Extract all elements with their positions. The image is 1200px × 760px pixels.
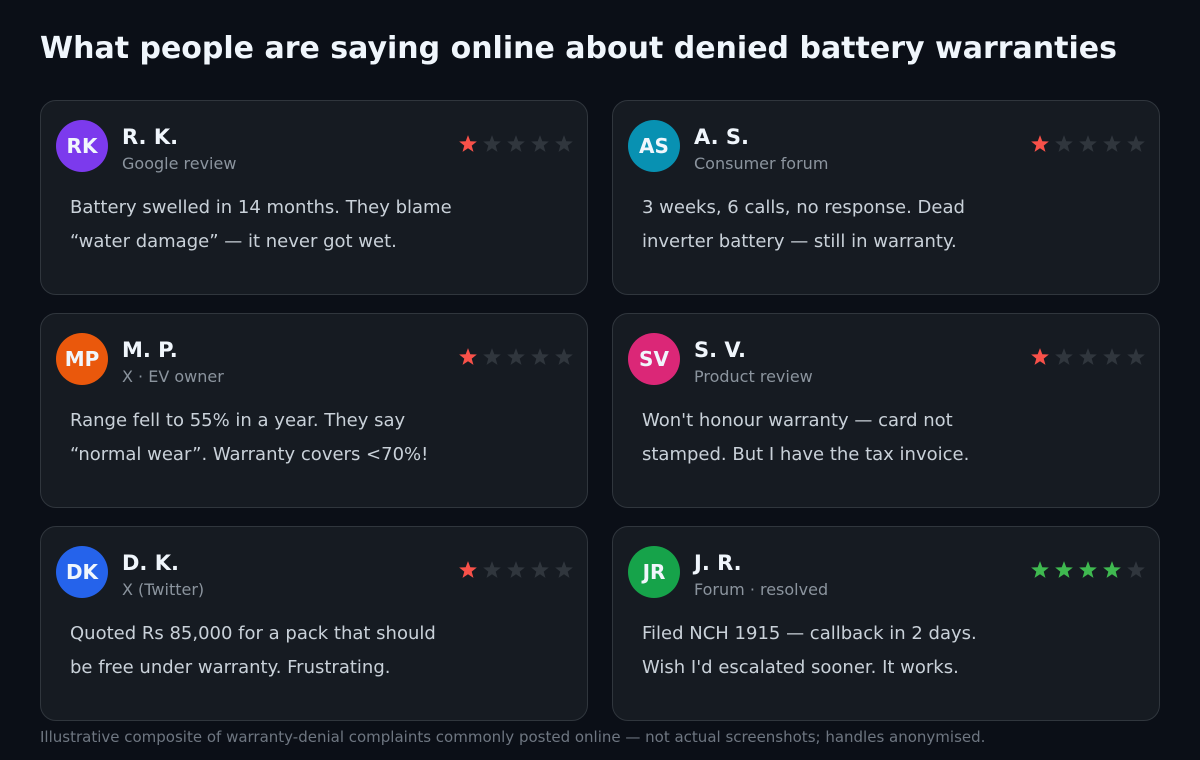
review text: inverter battery — still in warranty. <box>642 231 957 252</box>
review text: Wish I'd escalated sooner. It works. <box>642 657 959 678</box>
rating: 1 of 5 stars <box>459 348 573 365</box>
avatar: AS <box>628 120 680 172</box>
rating: 1 of 5 stars <box>459 561 573 578</box>
review text <box>70 197 452 252</box>
avatar: RK <box>56 120 108 172</box>
review text: Range fell to 55% in a year. They say <box>70 410 406 431</box>
reviewer name: D. K.: D. K. <box>122 551 179 575</box>
source: X · EV owner: X · EV owner <box>122 367 224 386</box>
source: Google review: Google review <box>122 154 236 173</box>
review text: Won't honour warranty — card not <box>642 410 953 431</box>
rating: 1 of 5 stars <box>1031 348 1145 365</box>
avatar: AS: AS <box>639 134 669 158</box>
reviewer name: S. V.: S. V. <box>694 338 746 362</box>
avatar: MP <box>56 333 108 385</box>
footnote: Illustrative composite of warranty-denial complaints commonly posted online — not actual screenshots; handles anonymised. <box>40 728 985 746</box>
review text: be free under warranty. Frustrating. <box>70 657 390 678</box>
panel: S. V. review <box>612 314 1160 508</box>
avatar: RK: RK <box>67 134 99 158</box>
panel: R. K. review <box>40 100 588 294</box>
review text <box>642 623 977 678</box>
avatar: DK <box>56 546 108 598</box>
avatar: MP: MP <box>65 347 99 371</box>
review text: “normal wear”. Warranty covers <70%! <box>70 444 428 465</box>
reviewer name: M. P.: M. P. <box>122 338 178 362</box>
review text <box>70 623 436 678</box>
avatar: SV: SV <box>639 347 669 371</box>
rating: 1 of 5 stars <box>1031 135 1145 152</box>
review text: Filed NCH 1915 — callback in 2 days. <box>642 623 977 644</box>
source: Product review: Product review <box>694 367 813 386</box>
reviewer name: R. K.: R. K. <box>122 125 178 149</box>
avatar: DK: DK <box>66 560 100 584</box>
reviewer name: J. R.: J. R. <box>692 551 742 575</box>
review text: “water damage” — it never got wet. <box>70 231 397 252</box>
review text <box>642 410 969 465</box>
avatar: JR <box>628 546 680 598</box>
title: What people are saying online about denied battery warranties <box>40 31 1117 66</box>
panel: A. S. review <box>612 100 1160 294</box>
review text: Quoted Rs 85,000 for a pack that should <box>70 623 436 644</box>
rating: 4 of 5 stars <box>1031 561 1145 578</box>
review text <box>70 410 428 465</box>
review text <box>642 197 965 252</box>
review text: 3 weeks, 6 calls, no response. Dead <box>642 197 965 218</box>
source: X (Twitter): X (Twitter) <box>122 580 204 599</box>
rating: 1 of 5 stars <box>459 135 573 152</box>
source: Consumer forum: Consumer forum <box>694 154 828 173</box>
avatar: SV <box>628 333 680 385</box>
avatar: JR: JR <box>641 560 665 584</box>
source: Forum · resolved: Forum · resolved <box>694 580 828 599</box>
panel: J. R. review <box>612 526 1160 720</box>
review text: Battery swelled in 14 months. They blame <box>70 197 452 218</box>
panel: M. P. review <box>40 314 588 508</box>
review text: stamped. But I have the tax invoice. <box>642 444 969 465</box>
reviewer name: A. S.: A. S. <box>694 125 749 149</box>
panel: D. K. review <box>40 526 588 720</box>
